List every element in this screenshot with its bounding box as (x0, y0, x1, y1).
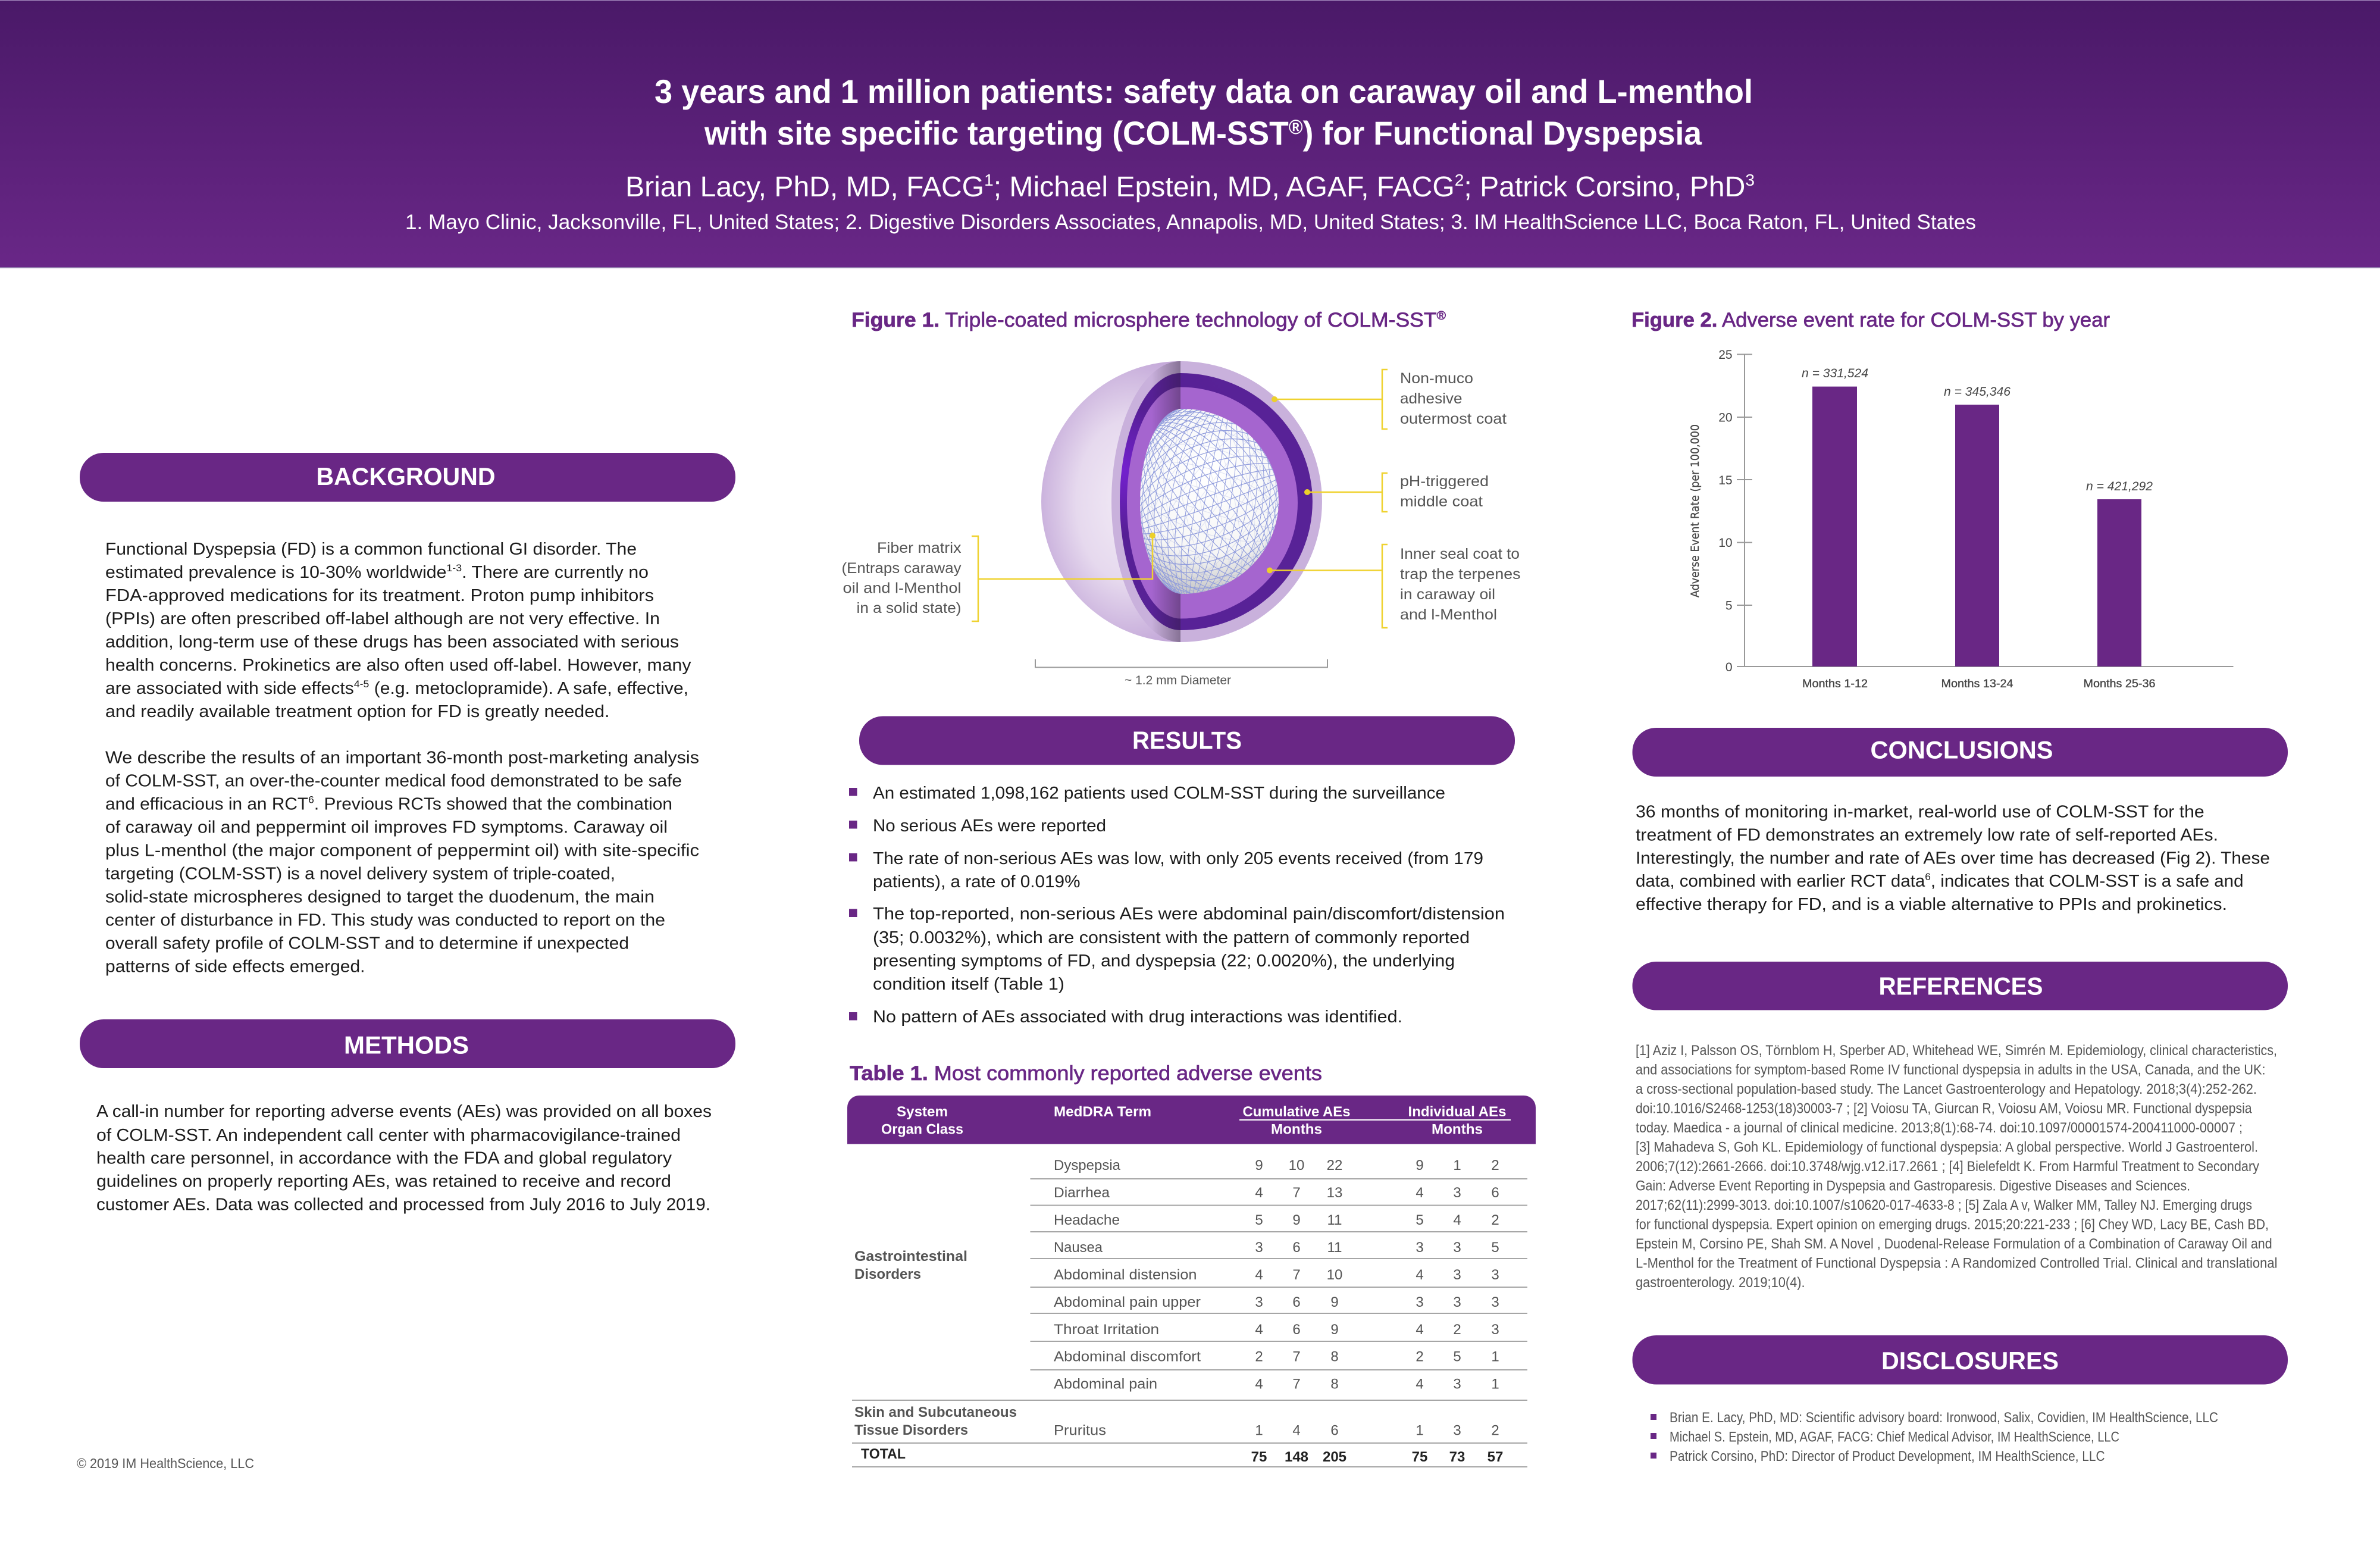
text block: conclusions: data, combined with earlier RCT data (1636, 872, 1920, 891)
row: total: 57 (1488, 1449, 1503, 1465)
text block: references: L-Menthol for the Treatment of Functional Dyspepsia : A Randomized Controlled Trial. Clinical and translational (1636, 1256, 2278, 1271)
bar value labels: n = 331,524 (1802, 367, 1868, 380)
row: pruritus: 2 (1491, 1422, 1499, 1439)
callout: inner seal coat: and l-Menthol (1400, 606, 1497, 623)
table header: Months (1432, 1121, 1483, 1138)
text block: background paragraph 2: overall safety profile of COLM-SST and to determine if unexpected (105, 934, 629, 953)
row: abdominal pain: 7 (1292, 1376, 1301, 1392)
x axis labels: Months 1-12 (1802, 678, 1868, 690)
row: throat irritation (1054, 1322, 1499, 1338)
row: abdominal pain (1054, 1376, 1499, 1392)
panel: background (80, 453, 735, 976)
text block: references: Epstein M, Corsino PE, Shah SM. A Novel , Duodenal-Release Formulation of a Combination of Caraway Oil and (1636, 1236, 2272, 1252)
bullet list: results: No pattern of AEs associated with drug interactions was identified. (873, 1007, 1402, 1027)
row: abdominal distension (1054, 1267, 1499, 1283)
panel: results (849, 716, 1515, 1027)
row labels: system organ class: Tissue Disorders (854, 1422, 968, 1438)
row labels: system organ class: Disorders (854, 1266, 921, 1282)
row: headache: 2 (1491, 1212, 1499, 1228)
dimension bracket: diameter (1035, 659, 1327, 687)
text block: background paragraph 1: (e.g. metoclopramide). A safe, effective, (369, 679, 688, 698)
row: abdominal distension: 10 (1327, 1267, 1342, 1283)
bullet list: disclosures (1651, 1410, 2218, 1464)
heading: results (859, 716, 1515, 765)
row: dyspepsia: 10 (1289, 1157, 1304, 1173)
row: diarrhea: Diarrhea (1054, 1185, 1110, 1201)
text block: background paragraph 2: of caraway oil and peppermint oil improves FD symptoms. Caraway oil (105, 818, 668, 837)
row: abdominal pain upper: 6 (1292, 1294, 1301, 1310)
bullet list: results: condition itself (Table 1) (873, 975, 1064, 994)
row: dyspepsia (1054, 1157, 1499, 1173)
bullet list: results: (35; 0.0032%), which are consistent with the pattern of commonly reported (873, 928, 1470, 947)
row: nausea: 11 (1327, 1240, 1342, 1256)
row: total: 205 (1323, 1449, 1346, 1465)
text block: background paragraph 2: 6 (308, 794, 314, 806)
row: throat irritation: 4 (1416, 1322, 1424, 1338)
x axis labels: Months 25-36 (2084, 678, 2155, 690)
title (654, 73, 1753, 152)
heading: conclusions (1633, 728, 2288, 777)
text block: background paragraph 1: 4-5 (354, 678, 369, 690)
text block: background paragraph 1: (PPIs) are often prescribed off-label although are not very effective. In (105, 609, 660, 628)
table 1: adverse events (847, 1096, 1536, 1467)
title: ® (1289, 116, 1303, 139)
text block: references (1636, 1043, 2278, 1291)
callout: fiber matrix: (Entraps caraway (841, 560, 962, 577)
heading: methods: METHODS (344, 1031, 469, 1059)
row: abdominal discomfort (1054, 1348, 1499, 1365)
row: total: 75 (1251, 1449, 1267, 1465)
callout: non-muco adhesive outermost coat: Non-muco (1400, 370, 1473, 387)
callout: pH-triggered middle coat (1304, 473, 1489, 512)
row: abdominal pain upper: 3 (1491, 1294, 1499, 1310)
text block: background paragraph 1: Functional Dyspepsia (FD) is a common functional GI disorder. The (105, 540, 637, 559)
bar: months 13-24 (1955, 405, 1999, 666)
bar value labels: n = 345,346 (1944, 385, 2011, 399)
row: total (861, 1446, 1503, 1465)
y axis tick labels: 10 (1718, 536, 1733, 550)
figure 1: microsphere diagram (841, 357, 1521, 687)
row: headache: 9 (1292, 1212, 1301, 1228)
chart axes (1737, 355, 2234, 666)
text block: references: and associations for symptom-based Rome IV functional dyspepsia in adults in the USA, Canada, and the UK: (1636, 1062, 2266, 1078)
callout: fiber matrix (841, 533, 1155, 621)
y axis tick labels: 25 (1718, 348, 1733, 362)
authors: Brian Lacy, PhD, MD, FACG (625, 171, 984, 203)
text block: background paragraph 2: of COLM-SST, an over-the-counter medical food demonstrated to be safe (105, 771, 682, 790)
row: pruritus: 1 (1255, 1422, 1263, 1439)
text block: conclusions: Interestingly, the number and rate of AEs over time has decreased (Fig 2). These (1636, 849, 2270, 868)
row: headache: 11 (1327, 1212, 1342, 1228)
title: 3 years and 1 million patients: safety data on caraway oil and L-menthol (654, 73, 1753, 110)
row: pruritus: 3 (1453, 1422, 1461, 1439)
row: diarrhea: 4 (1255, 1185, 1263, 1201)
panel: header banner (0, 0, 2380, 268)
heading: background: BACKGROUND (317, 462, 495, 490)
row: throat irritation: 6 (1292, 1322, 1301, 1338)
callout: inner seal coat: in caraway oil (1400, 586, 1495, 603)
row: nausea: 3 (1255, 1240, 1263, 1256)
row: diarrhea: 13 (1327, 1185, 1342, 1201)
bar value labels: n = 421,292 (2086, 480, 2153, 493)
row: abdominal discomfort: 8 (1330, 1348, 1339, 1365)
text block: methods (96, 1102, 712, 1215)
row: abdominal distension: 3 (1491, 1267, 1499, 1283)
callout: fiber matrix: in a solid state) (857, 600, 962, 616)
y axis tick labels: 20 (1718, 411, 1733, 425)
dimension bracket: diameter: ~ 1.2 mm Diameter (1125, 674, 1231, 687)
row: headache: 5 (1255, 1212, 1263, 1228)
table header: Organ Class (881, 1121, 963, 1138)
text block: background paragraph 2: We describe the results of an important 36-month post-marketing analysis (105, 749, 699, 768)
row: dyspepsia: 9 (1416, 1157, 1424, 1173)
row: abdominal pain upper: 3 (1416, 1294, 1424, 1310)
row: diarrhea: 6 (1491, 1185, 1499, 1201)
row: abdominal pain: 4 (1416, 1376, 1424, 1392)
row: abdominal pain upper: 3 (1255, 1294, 1263, 1310)
bullet list: disclosures: Brian E. Lacy, PhD, MD: Scientific advisory board: Ironwood, Salix, Covidien, IM HealthScience, LLC (1670, 1410, 2218, 1426)
text block: background paragraph 1: are associated with side effects (105, 679, 345, 698)
row: nausea: 5 (1491, 1240, 1499, 1256)
y axis tick labels: 5 (1726, 599, 1733, 613)
text block: conclusions: , indicates that COLM-SST is a safe and (1931, 872, 2243, 891)
row: abdominal pain upper: 9 (1330, 1294, 1339, 1310)
authors: ; Michael Epstein, MD, AGAF, FACG (994, 171, 1455, 203)
bullet list: results: An estimated 1,098,162 patients used COLM-SST during the surveillance (873, 784, 1445, 803)
row: dyspepsia: Dyspepsia (1054, 1157, 1121, 1173)
figure 1 heading: Figure 1. Triple-coated microsphere technology of COLM-SST (851, 309, 1415, 331)
text block: background paragraph 2 (105, 749, 699, 976)
row: total: TOTAL (861, 1446, 906, 1462)
bullet list: results: The top-reported, non-serious AEs were abdominal pain/discomfort/distension (873, 905, 1505, 924)
table header: MedDRA Term (1054, 1104, 1151, 1120)
row: abdominal discomfort: 2 (1416, 1348, 1424, 1365)
heading: conclusions: CONCLUSIONS (1871, 736, 2053, 764)
figure 2 heading: Figure 2. Adverse event rate for COLM-SST by year (1631, 309, 2110, 331)
text block: references: [1] Aziz I, Palsson OS, Törnblom H, Sperber AD, Whitehead WE, Simrén M. Epidemiology, clinical characteristics, (1636, 1043, 2277, 1059)
heading: disclosures (1633, 1335, 2288, 1384)
text block: background paragraph 1 (105, 540, 691, 721)
text block: references: a cross-sectional population-based study. The Lancet Gastroenterology and Hepatology. 2018;3(4):252-262. (1636, 1081, 2257, 1097)
row: abdominal distension: 4 (1416, 1267, 1424, 1283)
callout: inner seal coat: trap the terpenes (1400, 566, 1521, 583)
x axis labels (1802, 678, 2155, 690)
row: abdominal pain: 1 (1491, 1376, 1499, 1392)
row: pruritus: 6 (1330, 1422, 1339, 1439)
row: nausea: Nausea (1054, 1240, 1103, 1256)
text block: background paragraph 1: estimated prevalence is 10-30% worldwide (105, 563, 433, 582)
bar: months 25-36 (2097, 499, 2141, 666)
row: throat irritation: 9 (1330, 1322, 1339, 1338)
text block: conclusions: treatment of FD demonstrates an extremely low rate of self-reported AEs. (1636, 826, 2218, 845)
text block: background paragraph 2: plus L-menthol (the major component of peppermint oil) with site-specific (105, 841, 699, 860)
text block: background paragraph 2: patterns of side effects emerged. (105, 957, 365, 976)
text block: methods: of COLM-SST. An independent call center with pharmacovigilance-trained (96, 1126, 681, 1145)
text block: background paragraph 2: . Previous RCTs showed that the combination (314, 795, 672, 814)
text block: background paragraph 2: center of disturbance in FD. This study was conducted to report on the (105, 910, 665, 930)
authors: 3 (1745, 171, 1755, 189)
row: nausea: 6 (1292, 1240, 1301, 1256)
row: nausea: 3 (1453, 1240, 1461, 1256)
title: ) for Functional Dyspepsia (1303, 114, 1702, 152)
bullet list: disclosures: Patrick Corsino, PhD: Director of Product Development, IM HealthScience, LLC (1670, 1448, 2105, 1464)
row: abdominal distension: 3 (1453, 1267, 1461, 1283)
authors: 2 (1455, 171, 1464, 189)
heading: references (1633, 962, 2288, 1010)
row: diarrhea: 3 (1453, 1185, 1461, 1201)
row: total: 73 (1449, 1449, 1465, 1465)
row: abdominal distension: Abdominal distension (1054, 1267, 1197, 1283)
row: abdominal pain: 3 (1453, 1376, 1461, 1392)
heading: references: REFERENCES (1879, 972, 2043, 1000)
panel: conclusions (1633, 728, 2288, 914)
text block: references: today. Maedica - a journal of clinical medicine. 2013;8(1):68-74. doi:10.1097/00001574-200411000-00007 ; (1636, 1120, 2243, 1136)
bar: months 1-12 (1812, 387, 1857, 666)
row: dyspepsia: 2 (1491, 1157, 1499, 1173)
row: throat irritation: Throat Irritation (1054, 1322, 1159, 1338)
text block: methods: guidelines on properly reporting AEs, was retained to receive and record (96, 1172, 671, 1191)
row: pruritus: 4 (1292, 1422, 1301, 1439)
text block: background paragraph 2: and efficacious in an RCT (105, 795, 303, 814)
row labels: system organ class: Gastrointestinal (854, 1248, 967, 1265)
authors: 1 (984, 171, 994, 189)
row: abdominal pain upper: Abdominal pain upper (1054, 1294, 1201, 1310)
row: abdominal distension: 4 (1255, 1267, 1263, 1283)
row: abdominal pain: 4 (1255, 1376, 1263, 1392)
table header (847, 1096, 1536, 1144)
row: nausea (1054, 1240, 1499, 1256)
row: nausea: 3 (1416, 1240, 1424, 1256)
title: with site specific targeting (COLM-SST (704, 114, 1317, 152)
callout: inner seal coat: Inner seal coat to (1400, 546, 1520, 562)
bullet list: disclosures: Michael S. Epstein, MD, AGAF, FACG: Chief Medical Advisor, IM HealthScience, LLC (1670, 1429, 2119, 1445)
y axis tick labels: 15 (1718, 474, 1733, 487)
row: abdominal pain upper (1054, 1294, 1499, 1310)
heading: results: RESULTS (1132, 727, 1242, 755)
row: headache (1054, 1212, 1499, 1228)
row: diarrhea (1054, 1185, 1499, 1201)
row: dyspepsia: 22 (1327, 1157, 1342, 1173)
authors: ; Patrick Corsino, PhD (1464, 171, 1745, 203)
text block: background paragraph 1: FDA-approved medications for its treatment. Proton pump inhibitors (105, 586, 654, 605)
heading: background (80, 453, 735, 502)
bullet list: results: The rate of non-serious AEs was low, with only 205 events received (from 179 (873, 849, 1483, 868)
text block: background paragraph 1: addition, long-term use of these drugs has been associated with serious (105, 633, 679, 652)
bullet list: results (849, 784, 1505, 1027)
text block: references: Gain: Adverse Event Reporting in Dyspepsia and Gastroparesis. Digestive Diseases and Sciences. (1636, 1178, 2190, 1194)
table 1 heading: Table 1. Most commonly reported adverse events (850, 1062, 1322, 1085)
panel: methods (80, 1019, 735, 1215)
affiliations: 1. Mayo Clinic, Jacksonville, FL, United States; 2. Digestive Disorders Associates, Annapolis, MD, United States; 3. IM HealthScience LLC, Boca Raton, FL, United States (405, 211, 1976, 234)
callout: non-muco adhesive outermost coat: adhesive (1400, 390, 1463, 407)
text block: conclusions: 6 (1925, 871, 1931, 882)
text block: methods: A call-in number for reporting adverse events (AEs) was provided on all boxes (96, 1102, 712, 1121)
text block: conclusions: effective therapy for FD, and is a viable alternative to PPIs and prokinetics. (1636, 895, 2227, 914)
table header: Months (1271, 1121, 1322, 1138)
figure 2: bar chart (1689, 348, 2234, 690)
microsphere illustration (1041, 357, 1322, 649)
copyright: © 2019 IM HealthScience, LLC (77, 1456, 254, 1471)
row: abdominal distension: 7 (1292, 1267, 1301, 1283)
text block: methods: health care personnel, in accordance with the FDA and global regulatory (96, 1149, 672, 1168)
panel: references (1633, 962, 2288, 1291)
table header: System (897, 1104, 948, 1120)
figure 1 heading: ® (1437, 309, 1446, 323)
row: headache: Headache (1054, 1212, 1120, 1228)
row: headache: 4 (1453, 1212, 1461, 1228)
row: pruritus: 1 (1416, 1422, 1424, 1439)
callout: non-muco adhesive outermost coat: outermost coat (1400, 411, 1507, 427)
row labels: system organ class (854, 1248, 1017, 1438)
callout: fiber matrix: oil and l-Menthol (843, 580, 962, 596)
row: abdominal pain upper: 3 (1453, 1294, 1461, 1310)
callout: pH-triggered middle coat: middle coat (1400, 493, 1483, 510)
table header: Individual AEs (1408, 1104, 1507, 1120)
text block: background paragraph 1: . There are currently no (462, 563, 649, 582)
text block: background paragraph 1: and readily available treatment option for FD is greatly needed. (105, 702, 609, 721)
row labels: system organ class: Skin and Subcutaneous (854, 1404, 1017, 1420)
text block: background paragraph 1: 1-3 (446, 562, 462, 574)
row: diarrhea: 4 (1416, 1185, 1424, 1201)
callout: pH-triggered middle coat: pH-triggered (1400, 473, 1489, 490)
row: total: 148 (1285, 1449, 1308, 1465)
row: pruritus: Pruritus (1054, 1422, 1106, 1439)
bullet list: results: presenting symptoms of FD, and dyspepsia (22; 0.0020%), the underlying (873, 952, 1455, 971)
heading: disclosures: DISCLOSURES (1881, 1347, 2059, 1375)
row: diarrhea: 7 (1292, 1185, 1301, 1201)
panel: disclosures (1633, 1335, 2288, 1464)
row: total: 75 (1412, 1449, 1427, 1465)
text block: background paragraph 2: solid-state microspheres designed to target the duodenum, the main (105, 888, 654, 907)
text block: references: doi:10.1016/S2468-1253(18)30003-7 ; [2] Voiosu TA, Giurcan R, Voiosu AM, Voiosu MR. Functional dyspepsia (1636, 1101, 2252, 1116)
text block: conclusions (1636, 802, 2270, 914)
text block: references: 2006;7(12):2661-2666. doi:10.3748/wjg.v12.i17.2661 ; [4] Bielefeldt K. From Harmful Treatment to Secondary (1636, 1159, 2259, 1175)
text block: background paragraph 1: health concerns. Prokinetics are also often used off-label. However, many (105, 656, 691, 675)
row: throat irritation: 4 (1255, 1322, 1263, 1338)
callout: inner seal coat (1267, 544, 1521, 628)
text block: methods: customer AEs. Data was collected and processed from July 2016 to July 2019. (96, 1196, 710, 1215)
fiber matrix mesh (1140, 409, 1279, 594)
row: throat irritation: 3 (1491, 1322, 1499, 1338)
table header: Cumulative AEs (1242, 1104, 1351, 1120)
row: pruritus (1054, 1422, 1499, 1439)
row: abdominal discomfort: 5 (1453, 1348, 1461, 1365)
text block: references: for functional dyspepsia. Expert opinion on emerging drugs. 2015;20:221-233 ; [6] Chey WD, Lacy BE, Cash BD, (1636, 1216, 2269, 1233)
text block: background paragraph 2: targeting (COLM-SST) is a novel delivery system of triple-coated, (105, 864, 615, 883)
x axis labels: Months 13-24 (1941, 678, 2013, 690)
row: headache: 5 (1416, 1212, 1424, 1228)
row: throat irritation: 2 (1453, 1322, 1461, 1338)
bar value labels (1802, 367, 2153, 493)
text block: references: gastroenterology. 2019;10(4). (1636, 1275, 1805, 1291)
y axis tick labels (1718, 348, 1733, 674)
text block: conclusions: 36 months of monitoring in-market, real-world use of COLM-SST for the (1636, 802, 2204, 821)
bullet list: results: No serious AEs were reported (873, 816, 1106, 835)
y axis tick labels: 0 (1726, 661, 1733, 674)
y axis title: Adverse Event Rate (per 100,000 (1689, 424, 1702, 597)
bullet list: results: patients), a rate of 0.019% (873, 872, 1081, 891)
row: abdominal discomfort: 2 (1255, 1348, 1263, 1365)
row: abdominal pain: Abdominal pain (1054, 1376, 1157, 1392)
callout: fiber matrix: Fiber matrix (877, 540, 962, 556)
row: abdominal discomfort: 7 (1292, 1348, 1301, 1365)
row: abdominal discomfort: 1 (1491, 1348, 1499, 1365)
row: abdominal discomfort: Abdominal discomfort (1054, 1348, 1201, 1365)
row: dyspepsia: 1 (1453, 1157, 1461, 1173)
text block: references: 2017;62(11):2999-3013. doi:10.1007/s10620-017-4633-8 ; [5] Zala A v, Walker MM, Talley NJ. Emerging drugs (1636, 1197, 2252, 1213)
row: abdominal pain: 8 (1330, 1376, 1339, 1392)
heading: methods (80, 1019, 735, 1068)
row: dyspepsia: 9 (1255, 1157, 1263, 1173)
callout: non-muco adhesive outermost coat (1272, 370, 1507, 429)
text block: references: [3] Mahadeva S, Goh KL. Epidemiology of functional dyspepsia: A global perspective. World J Gastroenterol. (1636, 1139, 2258, 1156)
